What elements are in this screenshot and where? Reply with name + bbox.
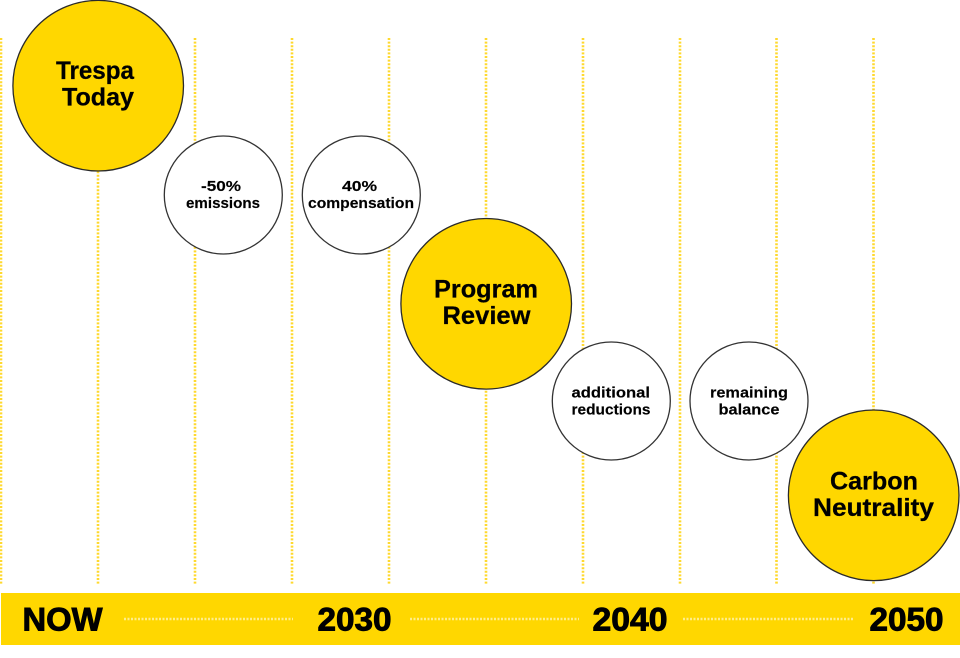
milestone: remaining balance xyxy=(690,342,808,460)
milestone: Trespa Today: Trespa xyxy=(56,57,135,85)
milestone: 40% compensation: compensation xyxy=(308,195,414,212)
milestone: Carbon Neutrality: Carbon xyxy=(830,467,918,495)
timeline bar xyxy=(1,593,960,645)
milestone: -50% emissions: emissions xyxy=(186,195,260,212)
milestone: Trespa Today: Today xyxy=(62,84,134,112)
milestone: 40% compensation: 40% xyxy=(342,178,377,195)
milestone: -50% emissions xyxy=(164,136,282,254)
milestone: Program Review xyxy=(401,218,572,389)
milestone: Carbon Neutrality xyxy=(788,410,959,581)
milestone: additional reductions xyxy=(552,342,670,460)
label: 2040: 2040 xyxy=(592,602,668,638)
label: 2050: 2050 xyxy=(870,602,944,638)
milestone: additional reductions: additional xyxy=(572,384,650,402)
milestone: -50% emissions: -50% xyxy=(201,178,241,195)
milestone: additional reductions: reductions xyxy=(572,401,650,418)
milestone: Program Review: Review xyxy=(442,302,531,330)
milestone: remaining balance: remaining xyxy=(710,384,788,402)
milestone: Trespa Today xyxy=(13,0,184,171)
milestone: Program Review: Program xyxy=(434,276,538,304)
milestone: Carbon Neutrality: Neutrality xyxy=(813,494,934,522)
milestone: 40% compensation xyxy=(302,136,420,254)
label: 2030: 2030 xyxy=(318,602,392,638)
milestone: remaining balance: balance xyxy=(718,401,780,418)
label: NOW: NOW xyxy=(22,602,103,638)
